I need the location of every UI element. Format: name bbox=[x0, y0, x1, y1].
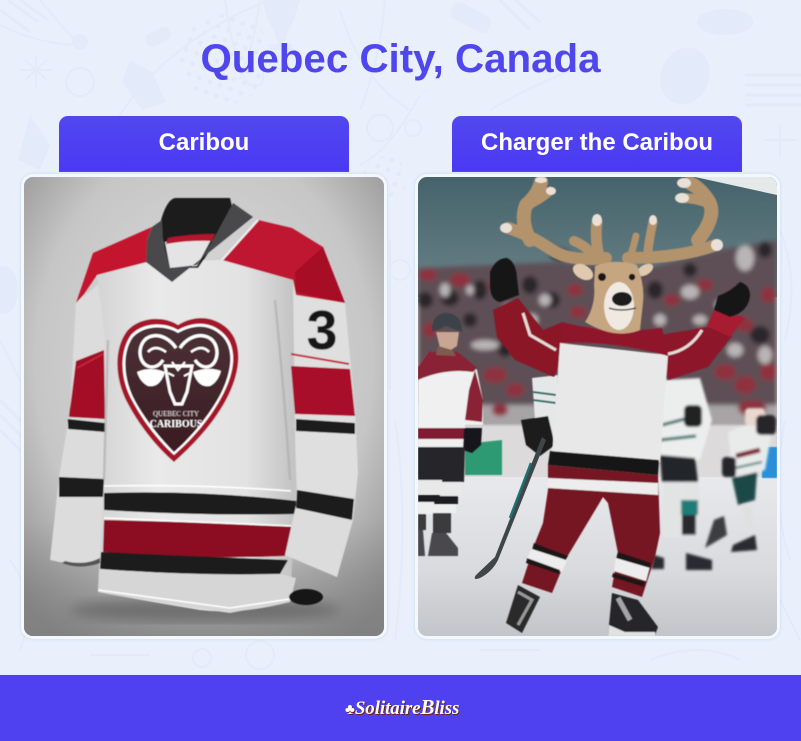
background players right bbox=[651, 378, 776, 570]
heart crest bbox=[117, 318, 238, 462]
crest text: QUEBEC CITY bbox=[153, 410, 199, 418]
ram head bbox=[140, 336, 217, 367]
jersey bbox=[50, 198, 358, 613]
logo: Solitaire Bliss: ♣SolitaireBliss bbox=[345, 695, 459, 719]
hockey stick bbox=[475, 437, 546, 579]
left player bbox=[418, 313, 483, 556]
right cuff over body bbox=[285, 490, 354, 577]
heading tab: Charger the Caribou bbox=[452, 116, 742, 172]
arm trim bbox=[523, 313, 702, 354]
sleeve red bands bbox=[69, 350, 105, 419]
antlers bbox=[508, 182, 716, 259]
right sleeve bbox=[285, 247, 358, 577]
heading tab: Charger the Caribou: Charger the Caribou bbox=[481, 129, 713, 156]
torso bbox=[552, 343, 668, 462]
panel: jersey photo bbox=[21, 174, 387, 639]
sleeve black bands bbox=[68, 419, 105, 432]
skates bbox=[506, 585, 540, 633]
shoulder yokes bbox=[76, 227, 152, 303]
shadow under jersey bbox=[70, 598, 340, 622]
arena wall bbox=[418, 177, 777, 297]
folds bbox=[104, 300, 290, 480]
hem inner dark bbox=[289, 589, 323, 605]
rink signs bbox=[465, 440, 777, 520]
collar bbox=[146, 203, 253, 282]
body bbox=[97, 260, 296, 611]
blurred crowd bbox=[417, 240, 777, 432]
number 3: 3 bbox=[307, 299, 337, 361]
heart crest: CARIBOUS bbox=[150, 419, 203, 430]
ice bbox=[418, 477, 777, 636]
collar inside bbox=[160, 198, 234, 268]
right cuff bbox=[707, 308, 745, 337]
background player jersey behind stick bbox=[521, 375, 558, 456]
mascot bbox=[490, 177, 750, 636]
snout bbox=[604, 282, 634, 330]
heading tab: Caribou: Caribou bbox=[159, 129, 249, 156]
gloves bbox=[490, 258, 519, 302]
sock stripes bbox=[526, 546, 568, 572]
head bbox=[585, 262, 643, 334]
arms bbox=[493, 298, 566, 377]
panel: mascot photo bbox=[415, 174, 780, 639]
heading tab: Caribou bbox=[59, 116, 349, 172]
pants bbox=[522, 465, 660, 597]
ears bbox=[570, 260, 596, 284]
left sleeve bbox=[50, 270, 115, 564]
boards bbox=[418, 425, 777, 480]
eyes bbox=[598, 273, 606, 281]
hem stripes bbox=[548, 451, 659, 475]
title: Quebec City, Canada bbox=[200, 36, 601, 81]
hem stripes bbox=[104, 492, 297, 514]
footer bar bbox=[0, 675, 801, 741]
